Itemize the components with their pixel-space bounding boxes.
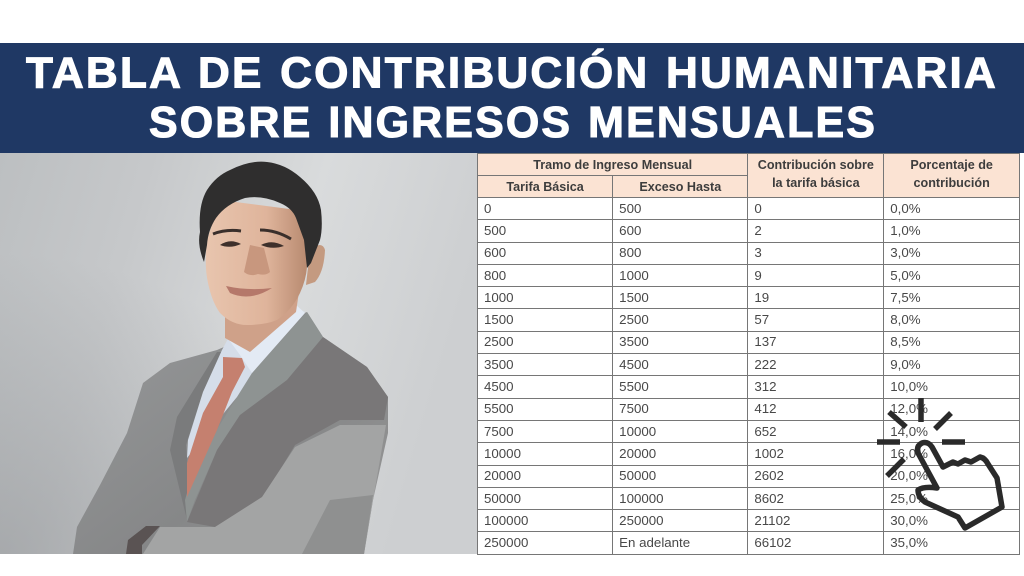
contribution table: 14,0% [890,424,928,439]
contribution table: 652 [754,424,777,439]
contribution table: 3500 [484,357,514,372]
contribution table: 10000 [484,446,521,461]
contribution table: 100000 [484,513,528,528]
contribution table: 600 [619,223,641,238]
contribution table: 250000 [484,535,528,550]
nose [244,245,270,275]
contribution table: 2602 [754,468,784,483]
contribution table: 0 [484,201,491,216]
contribution table: 3500 [619,334,649,349]
contribution table: 10,0% [890,379,928,394]
watch and hand [126,526,160,554]
contribution table: 137 [754,334,777,349]
folded sleeve [143,425,386,554]
contribution table: 8,0% [890,312,921,327]
icon: clicking hand [877,398,1005,531]
contribution table: Porcentaje de [910,158,993,172]
contribution table: 500 [619,201,641,216]
contribution table: 30,0% [890,513,928,528]
contribution table: Tarifa Básica [506,180,584,194]
title line 2: SOBRE INGRESOS MENSUALES [149,98,877,147]
contribution table: 7500 [619,401,649,416]
contribution table: 5500 [619,379,649,394]
contribution table: 1000 [619,268,649,283]
contribution table: 50000 [619,468,656,483]
contribution table: contribución [914,176,990,190]
head [199,162,325,325]
title banner [0,43,1024,153]
contribution table: 20000 [484,468,521,483]
eyebrows [213,230,291,239]
contribution table: 7500 [484,424,514,439]
contribution table: 8,5% [890,334,921,349]
contribution table: 5500 [484,401,514,416]
contribution table: 16,0% [890,446,928,461]
contribution table: 1500 [619,290,649,305]
necktie [187,357,245,497]
contribution table: 1,0% [890,223,921,238]
jacket chest shadow [187,337,388,527]
contribution table: 412 [754,401,777,416]
contribution table: 20000 [619,446,656,461]
contribution table: 9,0% [890,357,921,372]
contribution table: 250000 [619,513,664,528]
contribution table: 1000 [484,290,514,305]
suit jacket [73,312,388,554]
contribution table: 25,0% [890,490,928,506]
contribution table: Exceso Hasta [639,180,721,194]
contribution table: 5,0% [890,268,921,283]
contribution table: En adelante [619,535,690,550]
contribution table: 3,0% [890,245,921,260]
contribution table: 0,0% [890,201,921,216]
shirt collar [187,311,305,458]
contribution table: 10000 [619,424,656,439]
right lapel [185,312,323,522]
contribution table: 0 [754,201,762,216]
contribution table: la tarifa básica [772,176,860,190]
contribution table: 4500 [619,357,649,372]
hair [199,162,322,268]
contribution table: 50000 [484,490,521,506]
contribution table: 21102 [754,513,790,528]
contribution table: 35,0% [890,535,928,550]
neck [225,285,300,352]
eyes [220,241,284,248]
contribution table: 2 [754,223,762,238]
contribution table: 800 [619,245,641,260]
contribution table: 8602 [754,490,784,506]
contribution table: 4500 [484,379,514,394]
contribution table: Tramo de Ingreso Mensual [533,158,692,172]
contribution table: 9 [754,268,762,283]
contribution table: 12,0% [890,401,928,416]
contribution table: 312 [754,379,777,394]
contribution table: 222 [754,357,777,372]
title line 1: TABLA DE CONTRIBUCIÓN HUMANITARIA [26,48,998,98]
contribution table: 1002 [754,446,784,461]
contribution table: Contribución sobre [758,158,874,172]
left lapel [170,352,222,520]
contribution table: 57 [754,312,769,327]
contribution table: 600 [484,245,506,260]
contribution table: 3 [754,245,762,260]
contribution table: 2500 [619,312,649,327]
contribution table: 19 [754,290,769,305]
contribution table: 1500 [484,312,514,327]
photo: man in grey suit [0,153,477,554]
contribution table: 7,5% [890,290,921,305]
contribution table [477,153,1020,554]
contribution table: 2500 [484,334,514,349]
contribution table: 100000 [619,490,664,506]
contribution table: 66102 [754,535,791,550]
contribution table: 500 [484,223,506,238]
contribution table: 20,0% [890,468,928,483]
contribution table: 800 [484,268,506,283]
mouth [226,286,272,297]
